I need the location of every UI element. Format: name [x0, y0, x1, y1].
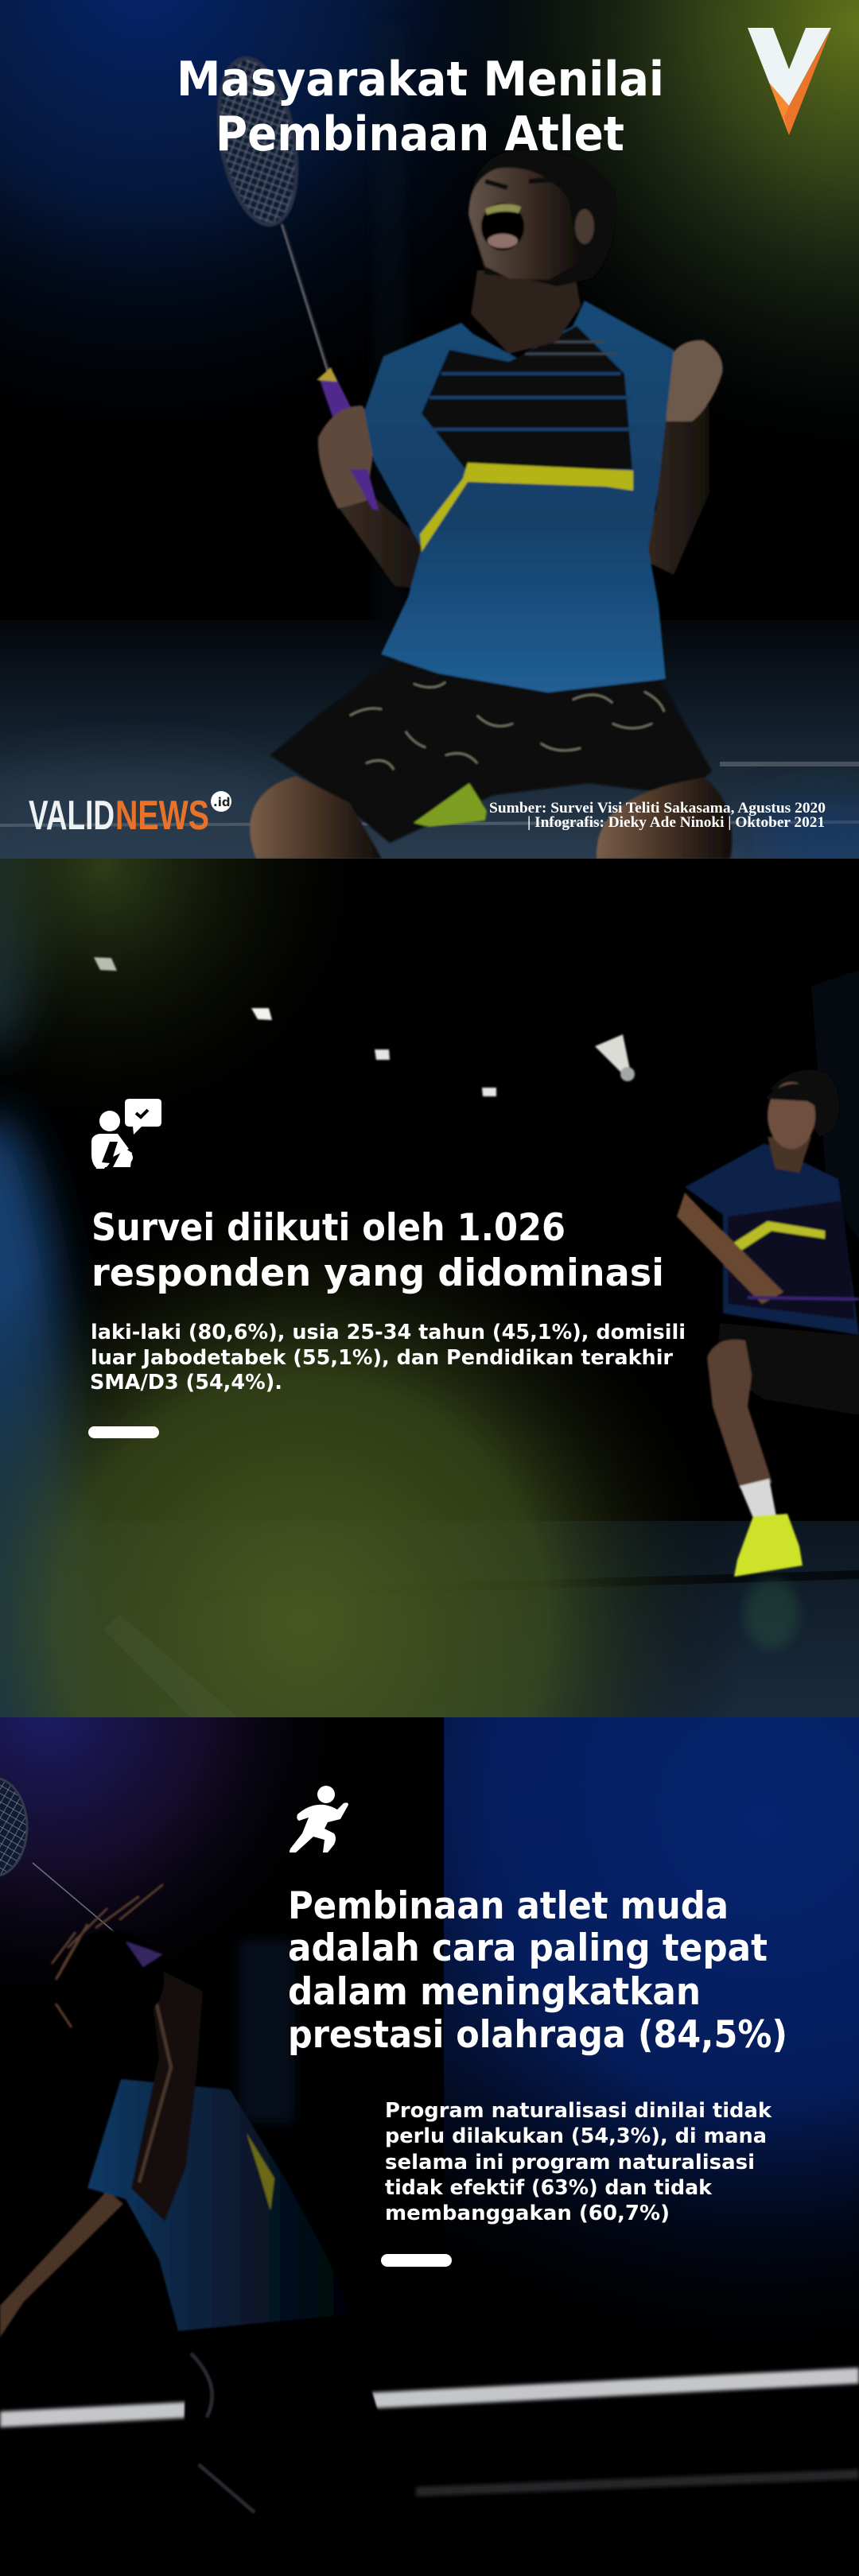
shorts: [181, 2320, 427, 2576]
shoe: [734, 1514, 803, 1577]
racket grip: [126, 1942, 163, 1967]
torso: [685, 1143, 859, 1335]
left knee: [250, 776, 382, 859]
ValidNews logo: .id: [213, 795, 231, 809]
neck: [768, 1137, 811, 1173]
shirt: [364, 301, 674, 692]
development heading: adalah cara paling tepat: [288, 1926, 768, 1970]
panel: survey respondents: [0, 859, 859, 1717]
development body text: perlu dilakukan (54,3%), di mana: [385, 2124, 767, 2148]
athlete celebrating: [207, 52, 732, 859]
arm: [677, 1193, 783, 1304]
survey background: [0, 859, 859, 1717]
head: [468, 150, 615, 286]
leg: [707, 1340, 772, 1488]
hair: [52, 1884, 164, 2029]
shirt chest pattern: [422, 326, 636, 469]
title: Pembinaan Atlet: [216, 107, 624, 162]
shoe: [414, 783, 487, 827]
development heading: [288, 1884, 787, 2057]
yellow accent: [247, 2133, 274, 2210]
development heading: Pembinaan atlet muda: [288, 1884, 729, 1928]
survey heading: responden yang didominasi: [91, 1251, 664, 1295]
survey body text: [90, 1321, 686, 1395]
development body text: [385, 2099, 772, 2225]
accent pill: [381, 2254, 452, 2267]
survey body text: SMA/D3 (54,4%).: [90, 1371, 282, 1395]
panel: athlete development: [0, 1717, 859, 2576]
development body text: Program naturalisasi dinilai tidak: [385, 2099, 772, 2123]
V logo: [748, 28, 831, 135]
survey heading: [91, 1206, 664, 1295]
yellow stripe: [420, 463, 633, 552]
source credits: Sumber: Survei Visi Teliti Sakasama, Agustus 2020: [489, 800, 826, 817]
survey body text: luar Jabodetabek (55,1%), dan Pendidikan terakhir: [91, 1346, 673, 1370]
badminton player returning: [677, 1070, 859, 1650]
extended arm: [0, 2190, 123, 2337]
racket: [207, 52, 379, 513]
development body text: membanggakan (60,7%): [385, 2202, 670, 2225]
head: [765, 1070, 839, 1149]
survey body text: laki-laki (80,6%), usia 25-34 tahun (45,1%), domisili: [91, 1321, 686, 1344]
ValidNews logo: NEWS: [115, 793, 209, 839]
left arm and hand: [318, 405, 433, 588]
development heading: dalam meningkatkan: [288, 1970, 701, 2014]
development background: [0, 1717, 859, 2576]
source credits: [489, 800, 826, 831]
accent pill: [88, 1426, 159, 1438]
title: Masyarakat Menilai: [177, 52, 664, 107]
yellow stripe: [730, 1221, 825, 1255]
neck: [471, 270, 581, 354]
torso: [87, 2079, 351, 2331]
ceiling lights: [94, 957, 496, 1096]
right arm and fist: [647, 339, 724, 575]
ValidNews logo: VALID: [29, 793, 115, 839]
survey heading: Survei diikuti oleh 1.026: [91, 1206, 566, 1250]
shorts: [270, 660, 712, 843]
development body text: selama ini program naturalisasi: [385, 2151, 755, 2174]
shorts: [716, 1323, 859, 1415]
hero background: [0, 0, 859, 883]
ValidNews logo: [29, 791, 231, 839]
icon: survey respondent: [91, 1099, 161, 1169]
source credits: | Infografis: Dieky Ade Ninoki | Oktober 2021: [527, 814, 825, 831]
racket: [0, 1778, 126, 1942]
title: [181, 59, 660, 151]
development body text: tidak efektif (63%) dan tidak: [385, 2176, 713, 2200]
right knee: [597, 778, 732, 859]
sock: [740, 1479, 776, 1520]
athlete smashing: [0, 1884, 427, 2576]
raised arm: [131, 1964, 203, 2221]
shuttlecock: [595, 1034, 635, 1081]
panel: hero section: [0, 0, 859, 883]
net bands: [0, 2368, 859, 2496]
icon: running figure: [290, 1786, 348, 1852]
development heading: prestasi olahraga (84,5%): [288, 2013, 787, 2057]
